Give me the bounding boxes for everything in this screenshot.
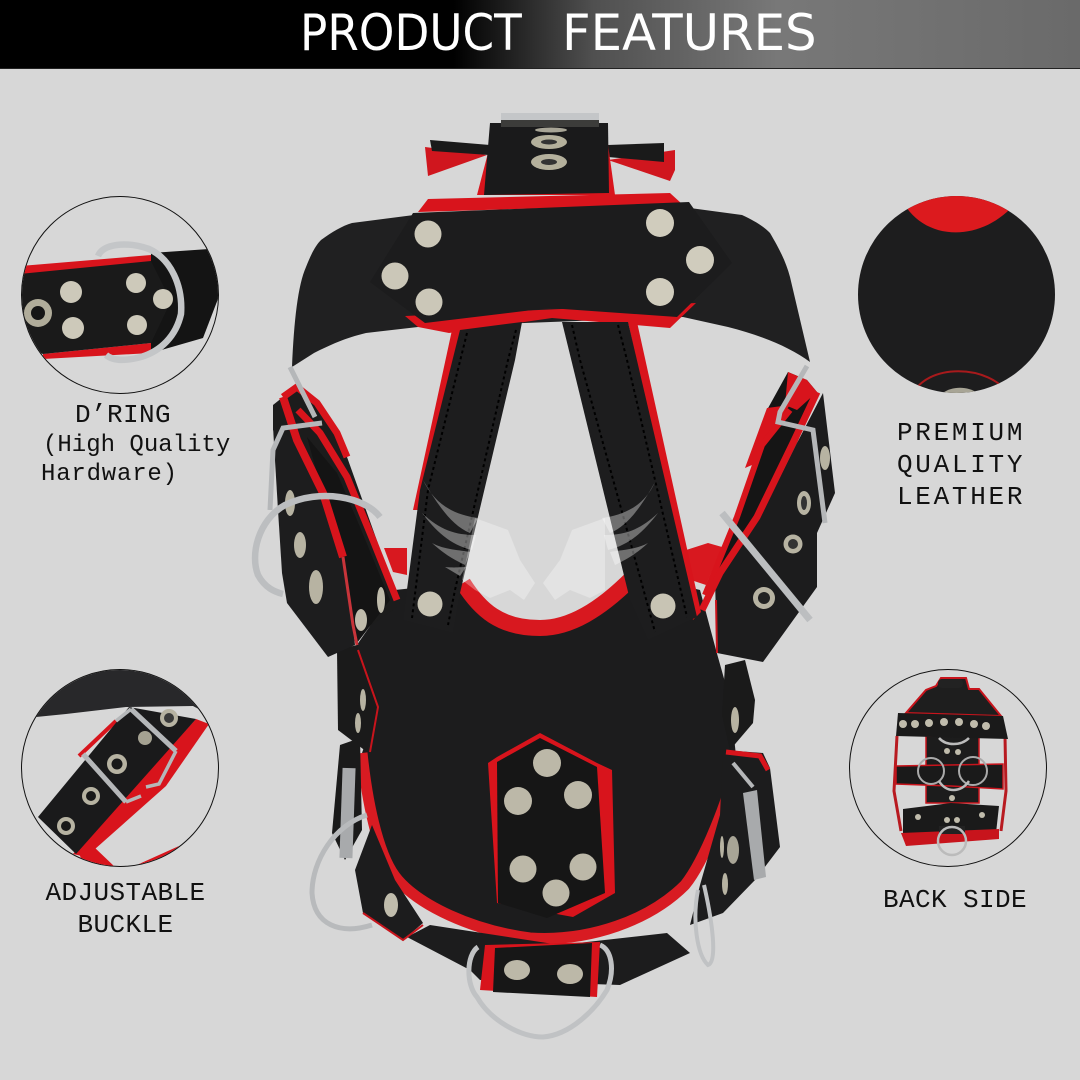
title: FEATURES [562,4,817,62]
head band [292,193,810,367]
top strap and buckle [425,113,675,195]
lower side straps [312,645,780,985]
label: adjustable buckle: ADJUSTABLE BUCKLE [45,878,206,940]
circle: D-ring detail [21,196,219,394]
title: PRODUCT [300,4,522,62]
circle: leather detail [858,196,1055,393]
wing watermark [422,480,658,600]
right side straps and rings [702,366,835,662]
label: D'ring: D’RING [75,400,171,430]
circle: adjustable buckle detail [21,669,219,867]
label: premium quality leather: PREMIUM QUALITY LEATHER [897,418,1025,512]
vertical straps [403,322,701,640]
bottom tab and D-ring [469,942,611,1037]
label: D'ring: (High Quality [43,432,230,459]
label: D'ring: Hardware) [41,461,178,488]
chest panel [352,543,737,938]
label: D'ring [41,400,230,488]
left side straps and rings [255,367,400,657]
circle: back side view [849,669,1047,867]
label: back side: BACK SIDE [883,885,1027,915]
title [300,4,817,62]
header banner [0,0,1080,69]
